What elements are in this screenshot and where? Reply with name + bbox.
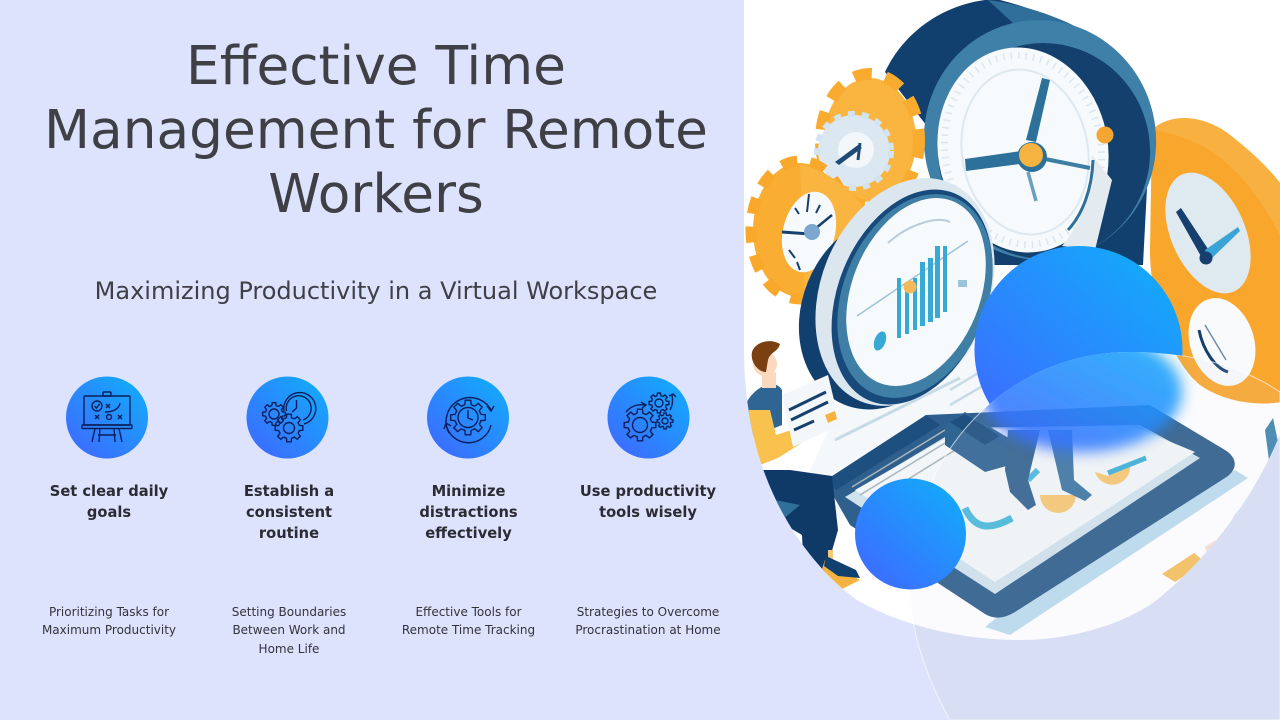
icon: strategy board [66, 376, 148, 458]
description: time tracking tools: Effective Tools for [415, 605, 522, 619]
right orange clock [1148, 118, 1280, 403]
upper gear [817, 74, 919, 206]
description: setting boundaries: Home Life [259, 642, 319, 656]
illustration panel [744, 0, 1280, 720]
heading: set clear daily goals: goals [87, 504, 131, 521]
title [44, 35, 708, 225]
heading: minimize distractions effectively: effectively [425, 525, 512, 542]
icon: gears and clock [246, 376, 328, 458]
medium chart gauge [798, 178, 995, 410]
large clock [885, 0, 1156, 265]
icon row [66, 376, 690, 458]
description: time tracking tools [402, 605, 535, 637]
heading: use productivity tools wisely: Use productivity [580, 483, 716, 500]
description: overcoming procrastination [575, 605, 721, 637]
tablet [826, 405, 1248, 635]
desk papers [810, 346, 989, 520]
heading: minimize distractions effectively: distractions [419, 504, 518, 521]
seated person [744, 341, 860, 590]
glass panel outline [910, 352, 1280, 720]
description: prioritizing tasks [42, 605, 176, 637]
description: prioritizing tasks: Maximum Productivity [42, 623, 176, 637]
heading: establish a consistent routine: Establish a [244, 483, 334, 500]
description: time tracking tools: Remote Time Tracking [402, 623, 535, 637]
small blue circle [855, 478, 966, 590]
heading: use productivity tools wisely [580, 483, 716, 521]
heading: minimize distractions effectively [419, 483, 518, 542]
heading: establish a consistent routine: consistent [246, 504, 332, 521]
title: Workers [268, 163, 484, 225]
large blue circle [974, 246, 1182, 404]
heading: minimize distractions effectively: Minimize [432, 483, 505, 500]
heading: use productivity tools wisely: tools wisely [599, 504, 697, 521]
heading: set clear daily goals: Set clear daily [50, 483, 168, 500]
description: setting boundaries: Between Work and [232, 623, 346, 637]
description: overcoming procrastination: Procrastination at Home [575, 623, 721, 637]
title: Management for Remote [44, 99, 708, 161]
lower gear with dial [751, 161, 862, 300]
subtitle: Maximizing Productivity in a Virtual Workspace [95, 277, 657, 305]
description: setting boundaries: Setting Boundaries [232, 605, 346, 619]
icon: productivity gears [608, 376, 690, 458]
heading: set clear daily goals [50, 483, 168, 521]
description: setting boundaries [232, 605, 346, 656]
description: overcoming procrastination: Strategies to Overcome [577, 605, 719, 619]
heading: establish a consistent routine: routine [259, 525, 319, 542]
illustration artwork [744, 0, 1280, 640]
icon: gear clock cycle [427, 376, 509, 458]
blurred circle behind glass [982, 332, 1182, 452]
glass panel tint [910, 352, 1280, 720]
description: prioritizing tasks: Prioritizing Tasks for [49, 605, 169, 619]
desk corner items [1162, 418, 1278, 582]
standing figure and printer [945, 412, 1092, 510]
heading: establish a consistent routine [244, 483, 334, 542]
title: Effective Time [186, 35, 566, 97]
